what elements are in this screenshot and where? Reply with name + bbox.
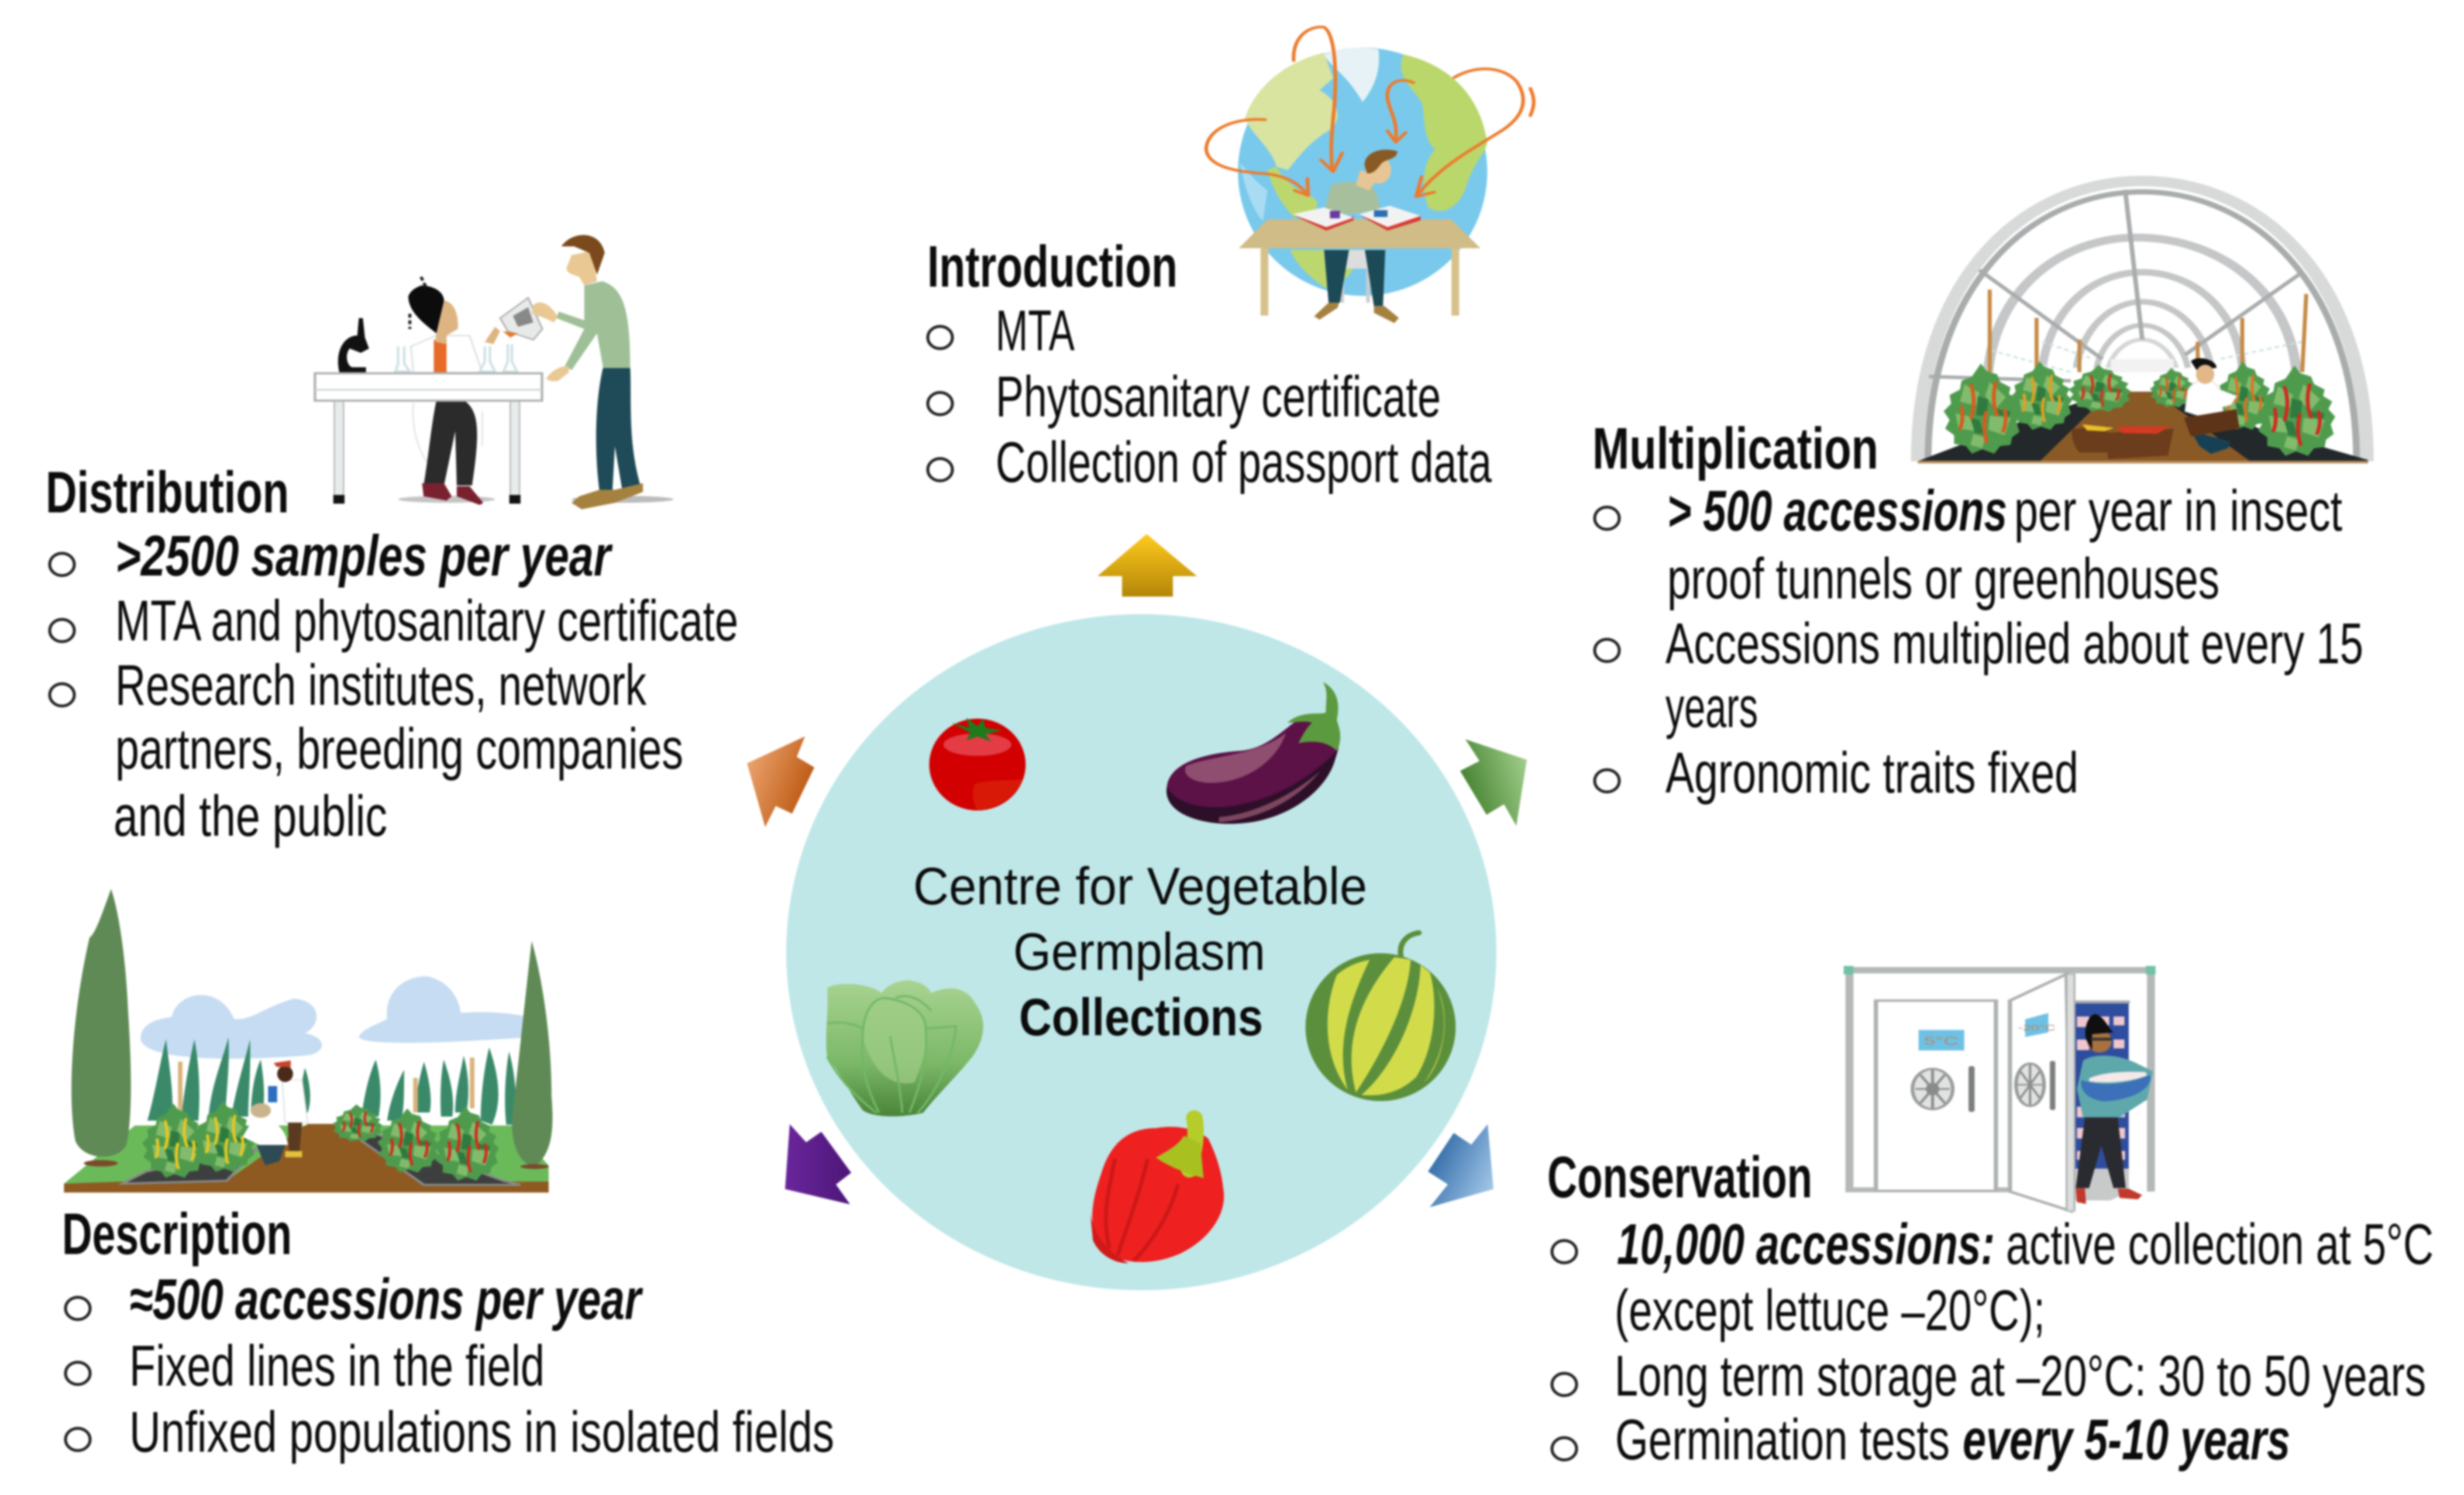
list: distribution items: Research institutes, network [115,653,647,717]
icon: scientist at lab bench with visitor [315,235,673,509]
panel: introduction [927,27,1534,494]
list: description items: Fixed lines in the field [129,1334,545,1398]
icon: eggplant [1166,682,1340,824]
list: multiplication items: Agronomic traits fixed [1665,740,2078,805]
label: minus 20 degrees: -20°C [2018,1024,2056,1033]
list: introduction items: Phytosanitary certificate [996,364,1441,429]
list: conservation items [1552,1212,2434,1472]
icon: watermelon [1306,933,1455,1101]
heading: Description: Description [62,1201,292,1267]
icon: insect proof tunnel with pepper plants [1918,181,2368,463]
arrow: to multiplication [1460,739,1527,826]
list: distribution items: and the public [113,784,387,848]
centre title [913,857,1367,1047]
list: description items [66,1267,834,1464]
list: multiplication items: years [1665,675,1758,739]
panel: multiplication [1592,181,2368,805]
list: distribution items: >2500 samples per year [115,523,613,588]
heading: Multiplication: Multiplication [1592,416,1878,481]
list: multiplication items [1595,478,2363,805]
icon: lettuce [826,980,983,1117]
arrow: to distribution [747,736,814,827]
panel: description [62,889,834,1464]
list: multiplication items: proof tunnels or greenhouses [1667,546,2219,611]
icon: cold storage vault with technician [1844,966,2156,1211]
icon: tomato [929,718,1025,811]
heading: Conservation: Conservation [1547,1145,1812,1210]
centre title: Collections [1019,988,1263,1047]
centre title: Centre for Vegetable [913,857,1367,916]
list: description items: Unfixed populations in isolated fields [129,1400,834,1464]
arrow: up to introduction [1097,534,1197,597]
arrow: to description [785,1124,851,1204]
list: multiplication items: > 500 accessions [1667,478,2007,543]
list: conservation items: Germination tests [1615,1407,1950,1472]
list: multiplication items: per year in insect [2014,478,2342,543]
list: conservation items: every 5-10 years [1963,1407,2290,1472]
arrow: to conservation [1428,1124,1493,1207]
icon: person reading in front of globe [1206,27,1534,323]
list: conservation items: (except lettuce –20°C); [1615,1278,2045,1342]
list: introduction items: MTA [996,298,1075,363]
heading: Introduction: Introduction [927,234,1178,299]
list: distribution items: MTA and phytosanitary certificate [115,588,738,653]
list: conservation items: 10,000 accessions: [1617,1212,1995,1276]
list: introduction items [928,298,1492,494]
label: 5 degrees: 5°C [1923,1035,1959,1048]
list: distribution items: partners, breeding companies [115,717,683,781]
icon: red pepper [1090,1118,1224,1263]
background circle [786,614,1496,1290]
icon: field with cypress trees, plants and scientists [64,889,552,1193]
heading: Distribution: Distribution [46,460,289,525]
list: distribution items [50,523,738,848]
panel: central circle [786,614,1496,1290]
panel: conservation [1547,966,2434,1472]
list: introduction items: Collection of passport data [996,430,1492,494]
list: description items: ≈500 accessions per year [129,1267,643,1331]
centre title: Germplasm [1013,923,1265,981]
panel: distribution [46,235,738,848]
